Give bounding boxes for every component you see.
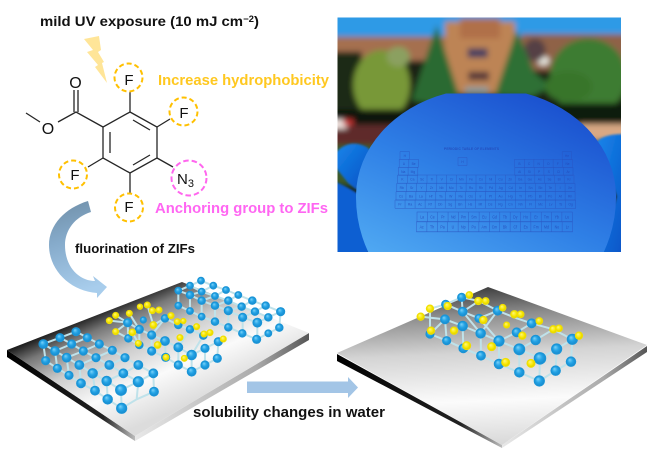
row 6: W [449, 194, 453, 198]
row 5: Ru [469, 186, 473, 190]
substrate edge: lower left side [7, 350, 135, 441]
row 4: V [441, 178, 444, 182]
row 4: Cr [450, 178, 454, 182]
row 4: Zn [508, 178, 512, 182]
actinides: Am [481, 224, 487, 230]
row 1 [400, 152, 572, 159]
blue nitrile gloves [332, 134, 628, 260]
lattice: ZIF before fluorination, back right [175, 277, 285, 343]
row 7: Db [438, 203, 442, 207]
icon: UV lightning bolt [84, 36, 107, 83]
row 5: Sb [538, 186, 542, 190]
azide group: 3 [188, 178, 194, 190]
row 5: Sr [410, 186, 414, 190]
row 6: La [419, 194, 423, 198]
fluorine groups: F [124, 199, 134, 216]
actinides: U [452, 224, 454, 230]
dashed circle around azide [172, 160, 206, 196]
row 7: Fr [398, 203, 402, 207]
substrate top face [337, 287, 647, 445]
row 5: Zr [430, 186, 434, 190]
row 7: Cn [508, 203, 513, 207]
lattice: remaining fluorinated ZIF [417, 292, 583, 386]
row 4: As [538, 178, 542, 182]
row 4: K [401, 178, 404, 182]
lanthanides: Nd [451, 215, 455, 220]
key cell [458, 158, 467, 166]
row 5: Y [420, 186, 423, 190]
row 2: Be [412, 162, 416, 166]
title: mild UV exposure: ) [254, 13, 259, 29]
row 6: Re [459, 194, 463, 198]
lanthanides: Tm [544, 215, 549, 220]
row 7: Ac [418, 203, 422, 207]
row 6: Rn [568, 194, 572, 198]
row 3: Si [528, 170, 531, 174]
row 2: N [538, 162, 540, 166]
row 7: Bh [458, 203, 462, 207]
fluorine groups: F [179, 105, 189, 122]
substrate edge: lower right side [135, 333, 309, 441]
row 3: Ar [567, 170, 571, 174]
row 7: Lv [549, 203, 553, 207]
silicon wafer [356, 94, 616, 252]
row 4: Ga [518, 178, 522, 182]
lanthanides [417, 212, 572, 222]
row 7: Ra [408, 203, 412, 207]
actinides: No [555, 224, 559, 230]
actinides: Lr [566, 224, 569, 230]
actinides: Ac [420, 224, 424, 230]
row 4: Br [558, 178, 562, 182]
actinides: Pu [472, 224, 476, 230]
molecule: fluorinated aryl azide [26, 64, 206, 222]
row 6 [396, 192, 575, 200]
carbonyl oxygen: O [69, 75, 82, 92]
row 7: Mc [538, 203, 543, 207]
row 7: Ds [488, 203, 493, 207]
actinides: Cf [514, 224, 518, 230]
row 6: Os [468, 194, 473, 198]
actinides: Th [430, 224, 434, 230]
row 7: Sg [448, 203, 452, 207]
row 3: P [538, 170, 541, 174]
row 6: Hf [429, 194, 433, 198]
row 2: Ne [565, 162, 570, 166]
lanthanides: Dy [513, 215, 518, 220]
row 7: Mt [478, 203, 482, 207]
title: mild UV exposure: mild UV exposure (10 mJ cm [40, 13, 231, 29]
lanthanides: Ce [430, 215, 435, 220]
row 6: Ba [409, 194, 413, 198]
row 2: Li [403, 162, 406, 166]
panel: left substrate with ZIF patterns [7, 277, 309, 441]
row 5 [397, 183, 575, 192]
row 6: Hg [508, 194, 513, 198]
lanthanides: Yb [555, 215, 559, 220]
row 5: Nb [439, 186, 444, 190]
panel: right substrate after development [337, 287, 647, 448]
row 7: Rg [498, 203, 503, 207]
row 7: Hs [468, 203, 473, 207]
actinides: Pa [440, 224, 445, 230]
lanthanides: La [420, 215, 425, 220]
photo: wafer with periodic table pattern [338, 18, 621, 252]
row 5: Te [548, 186, 552, 190]
lanthanides: Lu [565, 215, 569, 220]
lattice: ZIF before fluorination, front left [39, 328, 158, 413]
row 4: Cu [498, 178, 503, 182]
row 5: I [560, 186, 561, 190]
lanthanides: Sm [471, 215, 477, 220]
row 6: Po [548, 194, 552, 198]
lanthanides: Gd [492, 215, 497, 220]
lanthanides: Er [534, 215, 538, 220]
row 6: Pt [489, 194, 492, 198]
row 4: Se [547, 178, 552, 182]
lanthanides: Pr [441, 215, 445, 220]
actinides: Cm [492, 224, 497, 230]
actinides: Fm [534, 224, 539, 230]
label: increase hydrophobicity: Increase hydrophobicity [158, 73, 329, 89]
fluorine groups: F [124, 72, 134, 89]
key cell: H [461, 160, 464, 164]
row 4 [398, 175, 574, 183]
lanthanides: Tb [503, 215, 507, 220]
title: mild UV exposure: −2 [243, 14, 254, 24]
row 3: S [548, 170, 551, 174]
row 6: Ta [439, 194, 443, 198]
row 4: Ti [431, 178, 433, 182]
row 5: In [519, 186, 522, 190]
arrow: solubility change [247, 377, 358, 398]
row 4: Ge [528, 178, 532, 182]
label: anchoring group to ZIFs: Anchoring group to ZIFs [155, 201, 328, 217]
row 6: At [559, 194, 562, 198]
row 7: Nh [518, 203, 523, 207]
row 3: Mg [411, 170, 415, 174]
row 4: Sc [420, 178, 424, 182]
row 7 [395, 200, 576, 208]
periodic table pattern [395, 147, 576, 232]
label: solubility changes in water: solubility changes in water [193, 405, 385, 421]
row 1: He [565, 154, 569, 158]
row 4: Mn [459, 178, 464, 182]
row 5: Mo [449, 186, 454, 190]
actinides: Md [544, 224, 549, 230]
row 6: Au [498, 194, 503, 198]
row 5: Xe [568, 186, 572, 190]
ester oxygen: O [42, 121, 54, 138]
actinides: Bk [503, 224, 507, 230]
fluorine groups: F [70, 167, 80, 184]
actinides: Np [461, 224, 466, 230]
row 6: Tl [519, 194, 522, 198]
row 5: Rb [400, 186, 404, 190]
row 6: Cs [399, 194, 403, 198]
row 3: Al [518, 170, 521, 174]
row 4: Fe [469, 178, 473, 182]
substrate edge: lower left side [337, 354, 502, 448]
row 7: Og [568, 203, 573, 207]
row 7: Fl [529, 203, 532, 207]
row 2: C [528, 162, 531, 166]
substrate edge: lower right side [502, 346, 647, 448]
row 2: F [557, 162, 559, 166]
row 7: Ts [559, 203, 563, 207]
row 6: Ir [480, 194, 482, 198]
row 3: Cl [557, 170, 560, 174]
row 4: Ca [410, 178, 415, 182]
row 5: Cd [509, 186, 513, 190]
actinides: Es [524, 224, 528, 230]
dashed circles around fluorine [59, 64, 198, 222]
photo background: campus scene [338, 18, 621, 252]
azide group: N [177, 171, 188, 188]
lanthanides: Pm [461, 215, 466, 220]
bonds of the ring and substituents [26, 90, 173, 193]
label: fluorination of ZIFs: fluorination of ZIFs [75, 241, 195, 256]
row 5: Tc [459, 186, 463, 190]
row 5: Ag [499, 186, 503, 190]
substrate top face [7, 282, 309, 436]
actinides [416, 222, 572, 232]
row 2 [399, 159, 572, 167]
row 4: Co [479, 178, 483, 182]
lanthanides: Eu [482, 215, 486, 220]
row 5: Rh [479, 186, 483, 190]
row 1: H [404, 154, 407, 158]
lanthanides: Ho [523, 215, 528, 220]
row 6: Bi [539, 194, 542, 198]
row 3 [398, 167, 573, 175]
row 5: Sn [528, 186, 533, 190]
table heading: PERIODIC TABLE OF ELEMENTS [444, 147, 499, 151]
row 6: Pb [528, 194, 532, 198]
row 2: O [547, 162, 550, 166]
row 2: B [518, 162, 521, 166]
arrow: curved fluorination arrow [49, 201, 107, 298]
row 5: Pd [489, 186, 493, 190]
row 4: Kr [567, 178, 572, 182]
lattice: fluorinated ZIF, centre [106, 302, 226, 376]
fluorine groups [70, 72, 189, 216]
row 7: Rf [428, 203, 432, 207]
row 4: Ni [489, 178, 493, 182]
row 3: Na [401, 170, 405, 174]
